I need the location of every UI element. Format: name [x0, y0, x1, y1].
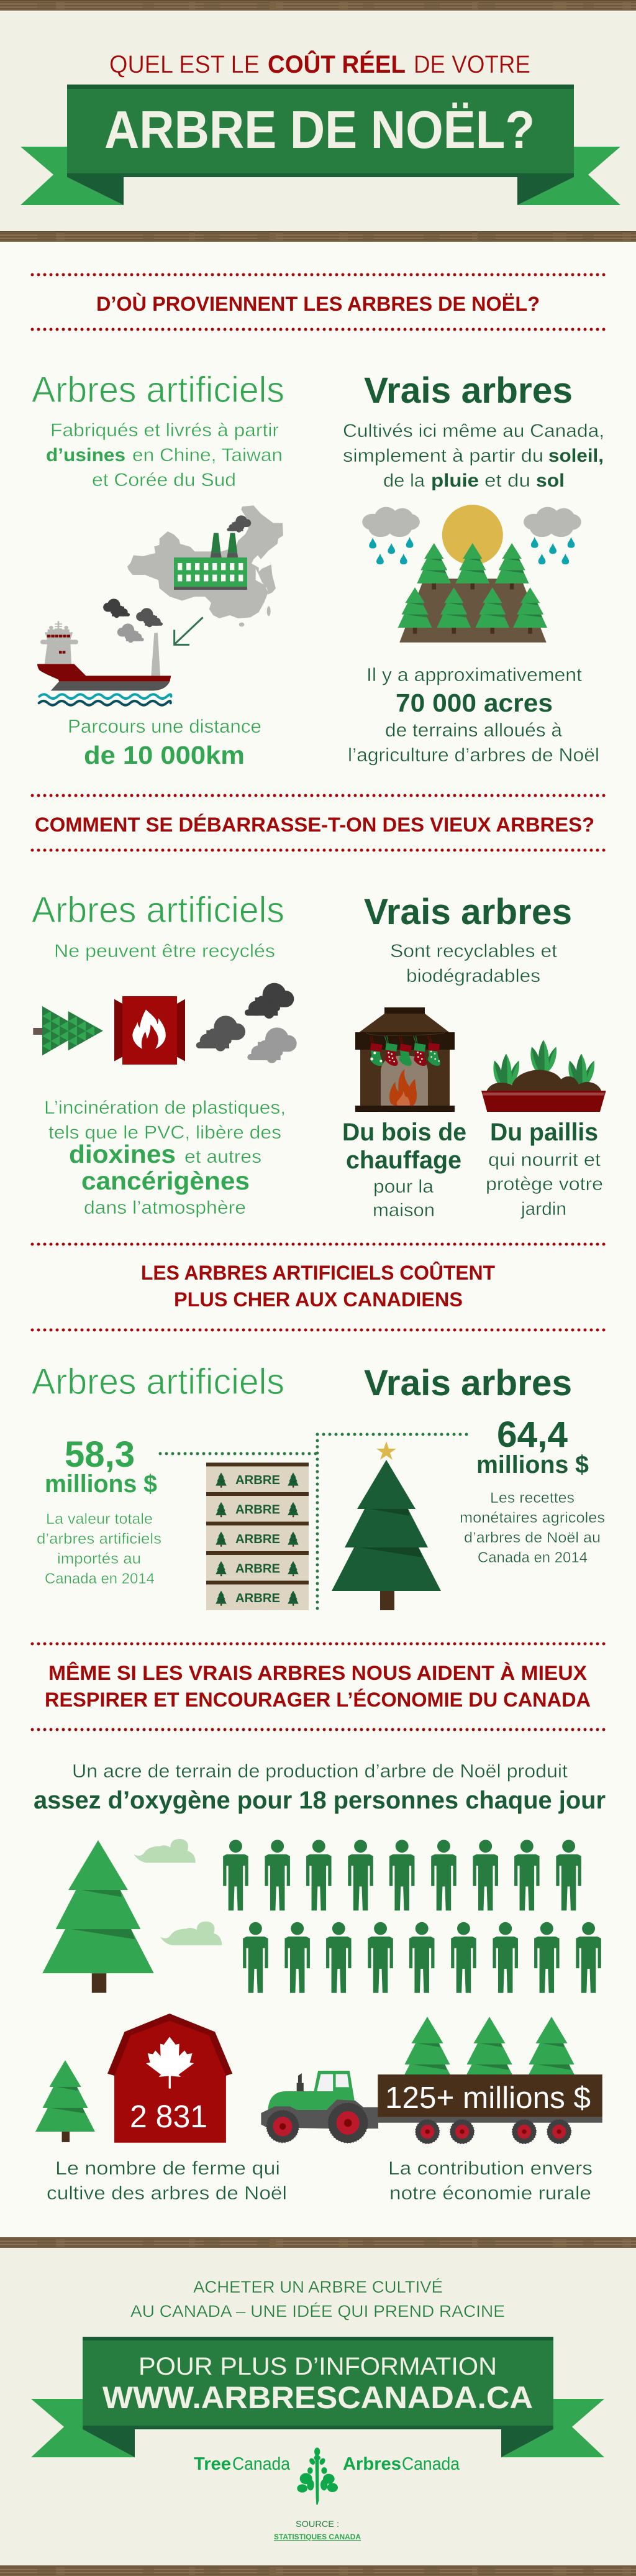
text: made in factories: et Corée du Sud — [92, 470, 236, 490]
text: distance travelled: de 10 000km — [84, 741, 245, 769]
icon: planter with mulch — [481, 1040, 606, 1112]
text: buy Canadian tagline: ACHETER UN ARBRE CULTIVÉ — [193, 2278, 443, 2296]
source credit — [274, 2519, 361, 2541]
stat: 58,3 million: Canada en 2014 — [45, 1570, 155, 1587]
stat: 64,4 million: monétaires agricoles — [460, 1510, 605, 1526]
text: distance travelled — [68, 715, 261, 769]
stat: 58,3 million: 58,3 — [65, 1434, 135, 1475]
stat: 2 831: 2 831 — [130, 2099, 207, 2134]
icon: factory — [174, 515, 251, 590]
section 4 heading with dotted rules: RESPIRER ET ENCOURAGER L’ÉCONOMIE DU CANADA — [45, 1689, 591, 1711]
text: rural contribution: La contribution envers — [388, 2157, 593, 2179]
people row 1 — [223, 1840, 581, 1910]
icon: rain clouds — [362, 507, 581, 564]
illustration: tree into incinerator and smoke — [33, 983, 297, 1065]
text: 70 000 acres: de terrains alloués à — [385, 719, 563, 741]
header panel — [0, 0, 636, 242]
text: incineration of plastics: et autres — [184, 1147, 261, 1167]
section 3 heading with dotted rules: LES ARBRES ARTIFICIELS COÛTENT — [141, 1262, 495, 1284]
text: grown in Canada: soleil, — [548, 446, 604, 466]
icon: planted trees — [398, 543, 547, 634]
logo: Tree Canada: Canada — [232, 2454, 291, 2474]
icon: stacked crates — [206, 1463, 309, 1610]
text: incineration of plastics — [44, 1098, 286, 1218]
heading: arbres artificiels: Arbres artificiels — [32, 1362, 284, 1402]
text: grown in Canada: simplement à partir du — [343, 446, 543, 466]
text: incineration of plastics: tels que le PVC, libère des — [48, 1122, 281, 1143]
icon: sun — [442, 505, 503, 565]
icon: star-topped tree — [332, 1441, 441, 1610]
logo: Tree Canada: Tree — [194, 2454, 231, 2474]
heading: vrais arbres: Vrais arbres — [364, 1363, 572, 1403]
title ribbon — [20, 85, 620, 205]
text: buy Canadian tagline — [130, 2278, 505, 2321]
icon: fireplace with stockings — [355, 1007, 455, 1112]
stat: 58,3 million: La valeur totale — [46, 1511, 153, 1528]
text: 70 000 acres: l’agriculture d’arbres de Noël — [348, 744, 599, 766]
illustration: sun, rain and tree plot — [362, 505, 581, 643]
text: oxygen claim — [34, 1760, 606, 1814]
illustration: fireplace and planter — [355, 1007, 606, 1112]
text: mulch: jardin — [520, 1199, 566, 1219]
text: made in factories: Fabriqués et livrés à partir — [50, 420, 279, 441]
stat: 64,4 million: Canada en 2014 — [478, 1549, 588, 1566]
text: grown in Canada: et du — [484, 470, 530, 491]
stat: 58,3 million: importés au — [57, 1551, 141, 1567]
text: made in factories — [46, 420, 283, 490]
icon: smoke clouds — [103, 598, 163, 643]
text: grown in Canada: de la — [383, 470, 425, 491]
icon: incinerator with flame — [114, 996, 185, 1065]
text: distance travelled: Parcours une distance — [68, 715, 261, 737]
stat: 64,4 million: 64,4 — [497, 1414, 568, 1455]
section 2 right column: real trees — [342, 892, 606, 1221]
text: oxygen claim: assez d’oxygène pour 18 personnes chaque jour — [34, 1787, 606, 1814]
text: number of farms: Le nombre de ferme qui — [55, 2157, 280, 2179]
text: mulch: protège votre — [486, 1174, 603, 1194]
icon: oxygen clouds and people — [134, 1839, 601, 1993]
header kicker text: QUEL EST LE — [109, 51, 260, 78]
title ribbon: ARBRE DE NOËL? — [104, 101, 535, 160]
stat: 58,3 million: millions $ — [45, 1470, 157, 1498]
heading: arbres artificiels: Arbres artificiels — [32, 890, 284, 930]
website ribbon: WWW.ARBRESCANADA.CA — [102, 2380, 533, 2415]
text: firewood — [342, 1119, 466, 1221]
icon: trailer trees — [398, 2017, 581, 2099]
text: 70 000 acres: Il y a approximativement — [366, 664, 582, 685]
text: recyclable and biodegradable: biodégradables — [406, 966, 540, 986]
text: rural contribution: notre économie rurale — [389, 2182, 591, 2204]
stat: 64,4 million: millions $ — [476, 1451, 589, 1478]
text: recyclable and biodegradable: Sont recyclables et — [390, 941, 558, 961]
header kicker text: DE VOTRE — [414, 51, 530, 78]
panel: farms and rural economy — [35, 2014, 602, 2204]
section 4 heading with dotted rules — [32, 1644, 607, 1730]
text: grown in Canada: Cultivés ici même au Canada, — [343, 421, 604, 441]
text: firewood: Du bois de — [342, 1119, 466, 1146]
icon: cargo ship — [37, 621, 171, 705]
text: firewood: maison — [373, 1200, 435, 1221]
stat: 58,3 million: d’arbres artificiels — [37, 1531, 161, 1547]
logo: Tree Canada — [194, 2447, 460, 2505]
text: 70 000 acres — [348, 664, 599, 766]
text: number of farms — [47, 2157, 287, 2204]
arrow — [175, 617, 203, 644]
icon: small tree — [35, 2060, 95, 2142]
stat: 58,3 million — [37, 1434, 161, 1587]
text: cannot be recycled: Ne peuvent être recyclés — [54, 941, 275, 961]
text: incineration of plastics: cancérigènes — [81, 1167, 250, 1195]
icon: red barn with maple leaf — [107, 2014, 232, 2143]
section 3 heading with dotted rules — [32, 1244, 607, 1330]
section 4 heading with dotted rules: MÊME SI LES VRAIS ARBRES NOUS AIDENT À MIEUX — [48, 1662, 588, 1684]
stat: 64,4 million: Les recettes — [490, 1490, 575, 1506]
text: incineration of plastics: dioxines — [69, 1140, 176, 1168]
heading: vrais arbres: Vrais arbres — [364, 370, 573, 411]
illustration: China map with factory and ship — [37, 505, 283, 705]
text: buy Canadian tagline: AU CANADA – UNE IDÉE QUI PREND RACINE — [130, 2302, 505, 2321]
source credit: STATISTIQUES CANADA — [274, 2532, 361, 2541]
text: 70 000 acres: 70 000 acres — [396, 689, 553, 717]
section 1 right column: real trees — [343, 370, 604, 766]
section 3: cost comparison — [32, 1362, 605, 1610]
section 2 left column: artificial trees — [32, 890, 297, 1218]
text: recyclable and biodegradable — [390, 941, 558, 986]
icon: stockings — [370, 1036, 440, 1066]
footer panel — [0, 2237, 636, 2576]
icon: leaf emblem — [297, 2447, 338, 2505]
icon: large tree — [42, 1840, 154, 1993]
text: incineration of plastics: L’incinération de plastiques, — [44, 1098, 286, 1118]
text: mulch: Du paillis — [490, 1119, 598, 1146]
logo: Tree Canada: Arbres — [343, 2454, 401, 2474]
text: grown in Canada: pluie — [431, 470, 479, 491]
people row 2 — [243, 1922, 601, 1993]
section 3 heading with dotted rules: PLUS CHER AUX CANADIENS — [174, 1288, 463, 1311]
text: grown in Canada: sol — [536, 470, 565, 491]
text: incineration of plastics: dans l’atmosphère — [84, 1198, 246, 1218]
stat: 64,4 million: d’arbres de Noël au — [464, 1529, 601, 1546]
text: number of farms: cultive des arbres de Noël — [47, 2182, 287, 2204]
stat: 64,4 million — [460, 1414, 605, 1566]
section 1 heading with dotted rules: D’OÙ PROVIENNENT LES ARBRES DE NOËL? — [96, 293, 540, 315]
heading: arbres artificiels: Arbres artificiels — [32, 370, 284, 410]
text: oxygen claim: Un acre de terrain de production d’arbre de Noël produit — [72, 1760, 568, 1782]
icon: China map — [127, 505, 283, 626]
source credit: SOURCE : — [296, 2519, 339, 2529]
header kicker text — [109, 50, 530, 78]
website ribbon: POUR PLUS D’INFORMATION — [139, 2353, 497, 2380]
section 1 left column: artificial trees — [32, 370, 284, 769]
text: made in factories: d’usines — [46, 445, 125, 465]
text: rural contribution — [388, 2157, 593, 2204]
header kicker text: COÛT RÉEL — [268, 50, 406, 78]
section 2 heading with dotted rules: COMMENT SE DÉBARRASSE-T-ON DES VIEUX ARBRES? — [35, 814, 594, 836]
text: mulch — [486, 1119, 603, 1219]
dotted comparison guides — [160, 1434, 473, 1610]
text: made in factories: en Chine, Taiwan — [132, 445, 283, 465]
icon: ground — [399, 579, 547, 643]
stat: 125+ millions: 125+ millions $ — [385, 2081, 591, 2115]
text: firewood: chauffage — [346, 1147, 461, 1174]
website ribbon — [31, 2337, 604, 2457]
icon: tractor and trailer — [261, 2071, 602, 2143]
text: firewood: pour la — [373, 1176, 434, 1197]
icon: smoke clouds — [196, 983, 297, 1063]
logo: Tree Canada: Canada — [402, 2454, 460, 2474]
illustration: tree giving oxygen to 18 people — [42, 1839, 601, 1993]
icon: sideways plastic tree — [33, 1006, 103, 1055]
text: mulch: qui nourrit et — [488, 1150, 601, 1170]
text: grown in Canada — [343, 421, 604, 491]
heading: vrais arbres: Vrais arbres — [364, 892, 572, 932]
